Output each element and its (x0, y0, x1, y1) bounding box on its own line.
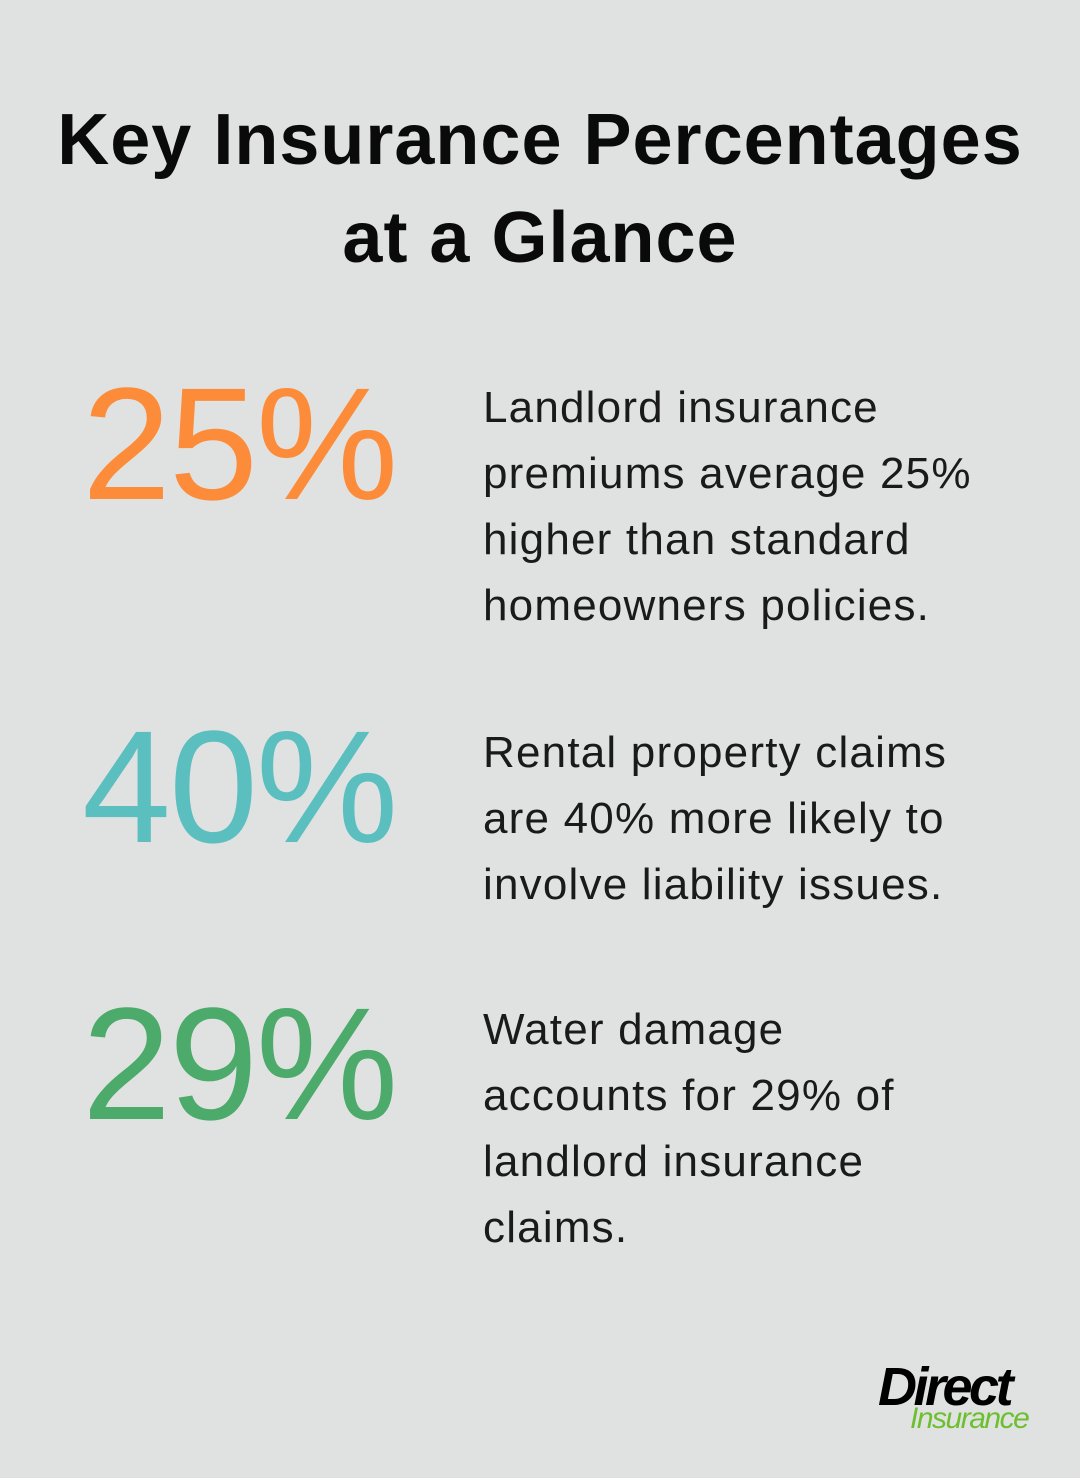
stat 2 text: are 40% more likely to (483, 794, 945, 843)
stat 2 text (483, 728, 947, 909)
title: Key Insurance Percentages (57, 100, 1023, 180)
stat 1 text: homeowners policies. (483, 581, 930, 630)
stat 1 text: premiums average 25% (483, 449, 972, 498)
stat 3 text: accounts for 29% of (483, 1071, 895, 1120)
stat 3 text (483, 1005, 895, 1252)
logo: Direct (878, 1357, 1010, 1417)
stat 2 number: 40% (82, 697, 396, 876)
stat 3 text: landlord insurance (483, 1137, 864, 1186)
stat 3 text: claims. (483, 1203, 628, 1252)
stat 1 text (483, 383, 972, 630)
logo (878, 1357, 1029, 1435)
stat 2 text: Rental property claims (483, 728, 947, 777)
stat 3 number: 29% (82, 974, 396, 1153)
logo: Insurance (910, 1402, 1028, 1435)
stat 1 number: 25% (82, 354, 396, 533)
title: at a Glance (342, 198, 738, 278)
title (57, 100, 1023, 278)
stat 1 text: higher than standard (483, 515, 911, 564)
stat 1 text: Landlord insurance (483, 383, 879, 432)
stat 2 text: involve liability issues. (483, 860, 943, 909)
stat 3 text: Water damage (483, 1005, 784, 1054)
